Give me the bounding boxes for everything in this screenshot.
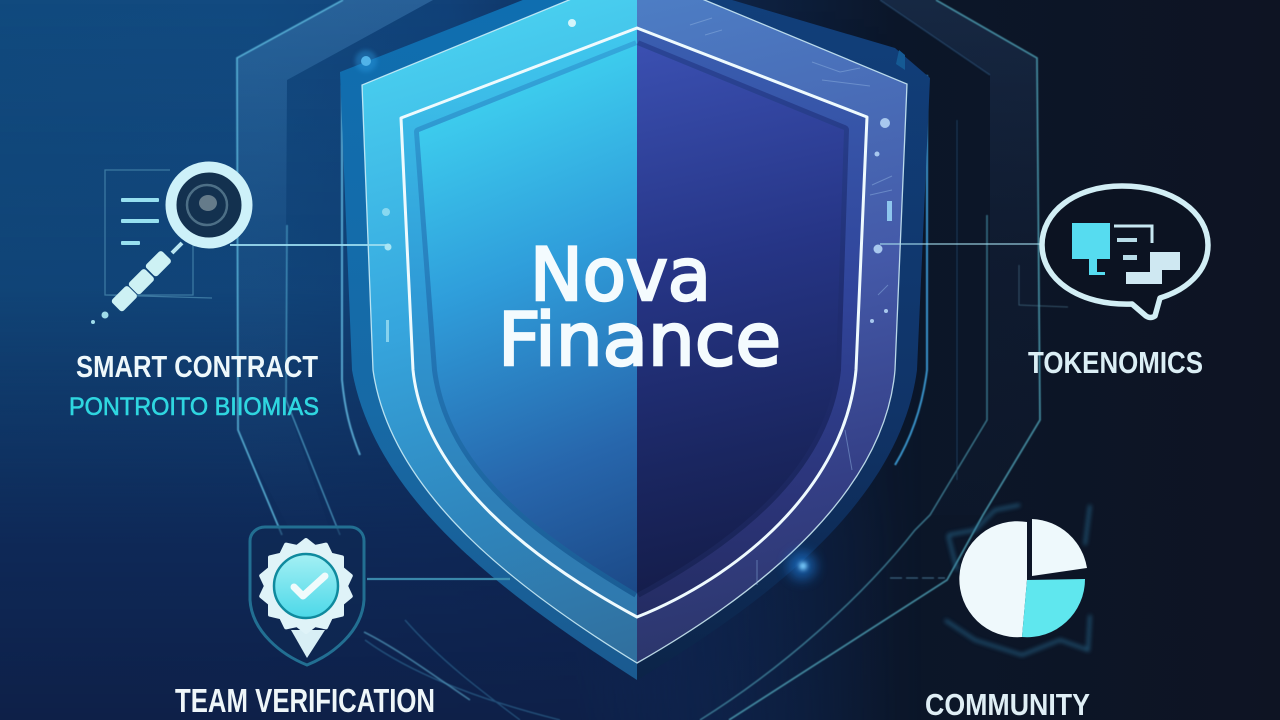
- sublabel: PONTROITO BIIOMIAS: [69, 393, 319, 421]
- shield outer dark rim: [340, 0, 930, 680]
- shield centre panel: [419, 45, 844, 593]
- icon: magnifier over document: [91, 167, 247, 324]
- shield inner ring and white line: [401, 28, 867, 617]
- item: team verification: [175, 527, 435, 719]
- item: smart contract audit: [69, 167, 319, 421]
- icon: pie chart: [959, 519, 1087, 637]
- connector lines: [230, 244, 1040, 579]
- shield light dots: [355, 19, 905, 342]
- icon: verification badge: [250, 527, 364, 665]
- item: community: [925, 505, 1090, 720]
- label: team verification: TEAM VERIFICATION: [175, 682, 435, 719]
- background circuit lines: [237, 0, 1068, 720]
- shield title: Nova Finance: [498, 233, 781, 383]
- glow spot: [788, 552, 816, 580]
- shield circuit scratches: [690, 18, 892, 585]
- shield title: Nova Finance: Finance: [498, 298, 781, 383]
- shield outer band: [362, 0, 907, 663]
- shield title: Nova Finance: Nova: [530, 233, 711, 318]
- label: smart contract: SMART CONTRACT: [76, 349, 318, 384]
- item: tokenomics: [1028, 186, 1208, 380]
- decorative network glow: [945, 505, 1090, 655]
- central shield: [340, 0, 930, 680]
- label: tokenomics: TOKENOMICS: [1028, 345, 1203, 380]
- icon: speech bubble with charts: [1042, 186, 1208, 318]
